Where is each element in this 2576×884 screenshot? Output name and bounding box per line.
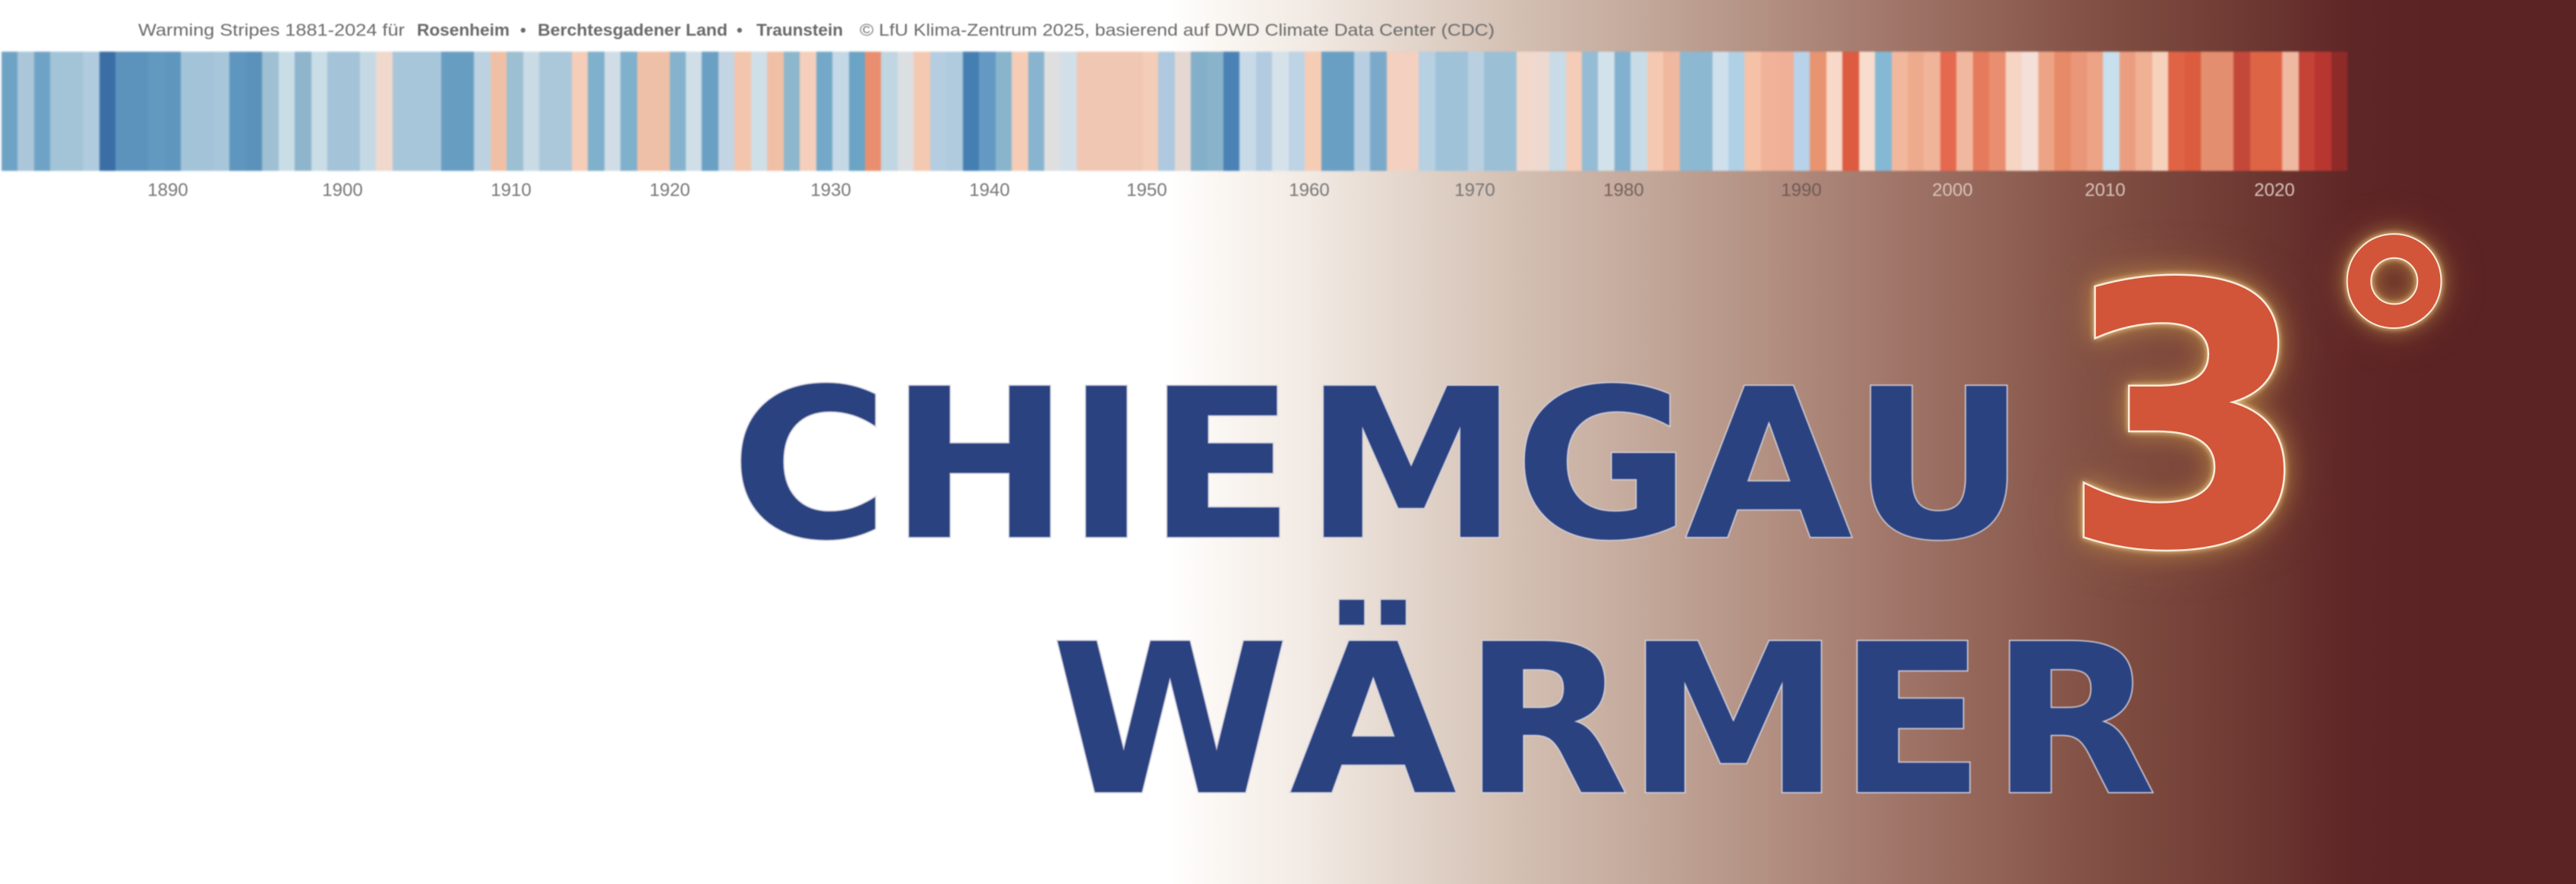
caption: data source: Traunstein [756,21,843,39]
caption: data source: Warming Stripes 1881-2024 für [138,21,405,39]
degree sign with glow: ° [2323,185,2465,516]
caption: data source: Berchtesgadener Land [538,21,728,39]
warming stripes chart [0,50,2348,172]
year axis labels [147,180,2295,200]
year axis labels: 1930 [810,180,851,200]
year axis labels: 1990 [1781,180,1822,200]
year axis labels: 2000 [1932,180,1973,200]
year axis labels: 1970 [1454,180,1495,200]
year axis labels: 1900 [322,180,363,200]
caption: data source: © LfU Klima-Zentrum 2025, basierend auf DWD Climate Data Center (CDC) [860,21,1495,39]
caption: data source: Rosenheim [417,21,510,39]
year axis labels: 1940 [969,180,1010,200]
caption: data source: • [737,21,743,39]
caption: data source: • [520,21,526,39]
year axis labels: 1890 [147,180,188,200]
year axis labels: 1910 [491,180,532,200]
year axis labels: 1920 [649,180,690,200]
year axis labels: 1960 [1289,180,1330,200]
year axis labels: 1980 [1603,180,1644,200]
year axis labels: 1950 [1126,180,1167,200]
caption: data source [138,21,1495,39]
year axis labels: 2020 [2254,180,2295,200]
big number: 3 with glow: 3 [2060,209,2312,630]
year axis labels: 2010 [2085,180,2126,200]
title: WÄRMER: WÄRMER [1051,598,2156,841]
title: CHIEMGAU: CHIEMGAU [731,344,2026,586]
